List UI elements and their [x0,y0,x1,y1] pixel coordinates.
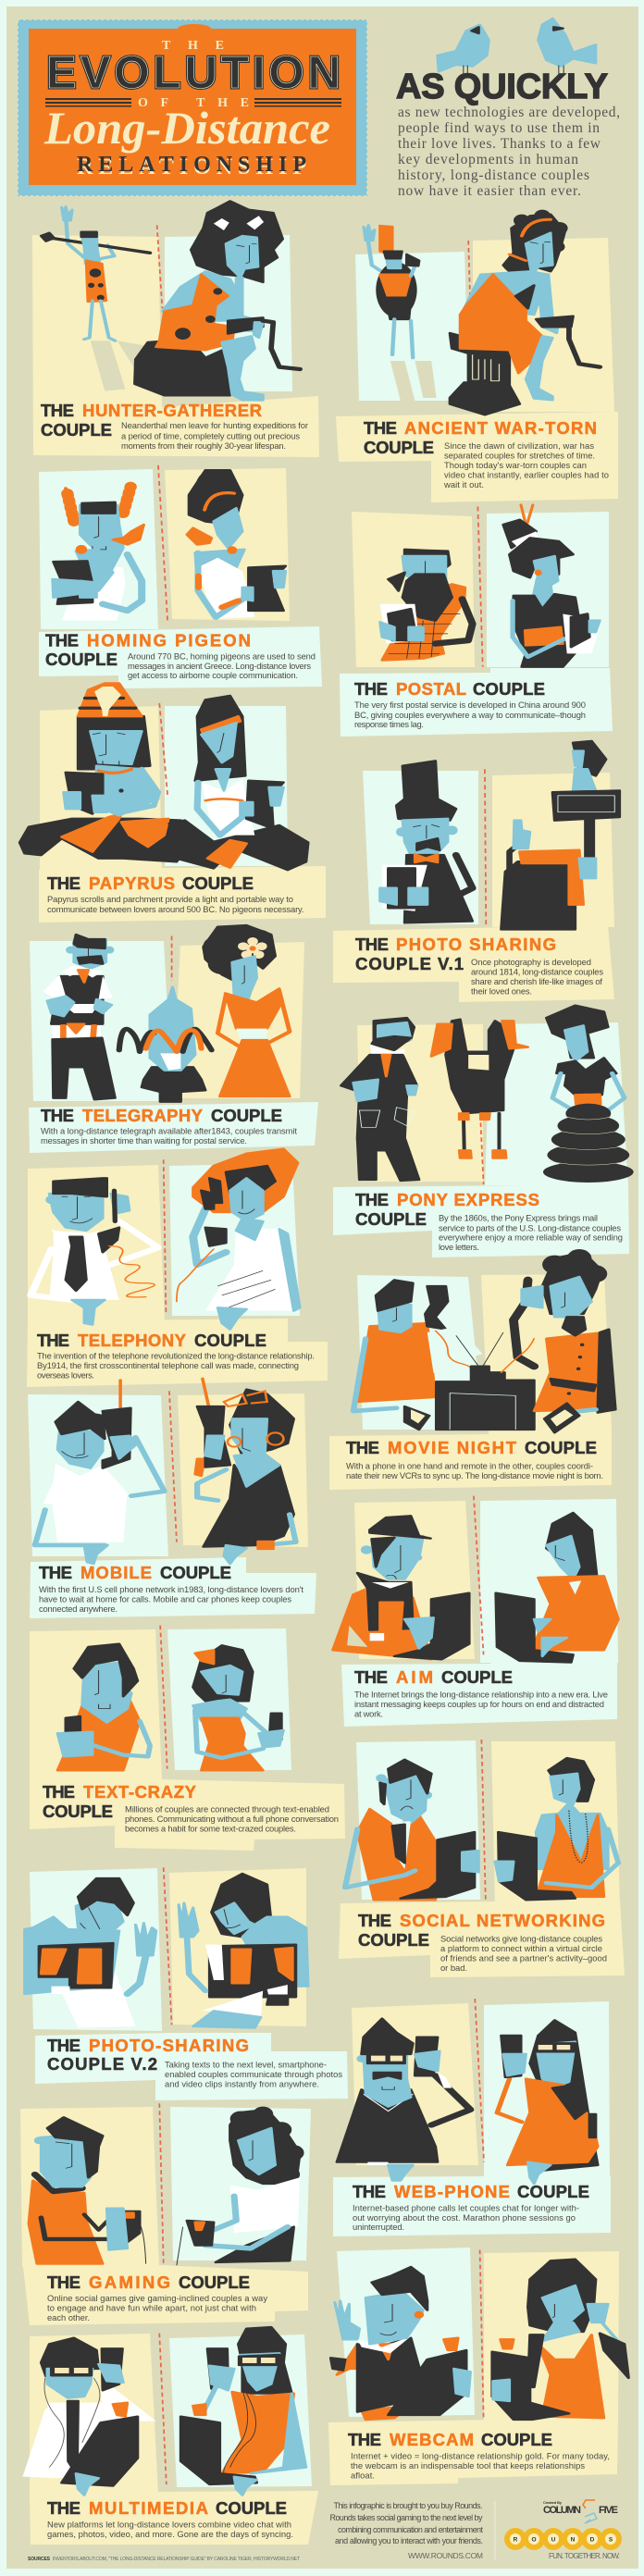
heading [348,2430,552,2449]
aim man figure [333,1516,469,1659]
photo woman figure [179,1874,308,2028]
description: becomes a habit for some text-crazed couples. [125,1823,296,1834]
description [47,894,303,914]
panel: multimedia couple [22,2327,318,2545]
heading [41,1106,282,1125]
top hat man figure [380,761,473,923]
heading [354,679,545,699]
heading [45,631,251,669]
description: afloat. [351,2471,375,2480]
description [39,1584,303,1614]
panel: homing pigeon couple [39,465,322,688]
panel: postal couple [340,505,613,737]
heading [346,1438,597,1457]
description: video chat instantly, earlier couples had to [444,470,609,479]
logo: column five: FIVE [599,2505,618,2516]
hunter woman figure [135,201,300,401]
heading: COUPLE [358,1930,429,1950]
gaming man figure [29,2117,146,2264]
heading: TELEGRAPHY [82,1106,204,1125]
backdrop and caption box [30,2334,318,2545]
heading: THE [364,418,397,438]
heading [47,873,254,893]
title plate: RELATIONSHIP [77,155,306,180]
heading: THE [354,679,388,699]
description: the webcam is an indispensable tool that keeps relationships [351,2460,585,2471]
description: games, photos, video, and more. Gone are the days of syncing. [47,2529,293,2539]
description: uninterrupted. [353,2222,404,2232]
backdrop and caption box [333,1022,629,1257]
description: Papyrus scrolls and parchment provide a light and portable way to [47,894,293,904]
geisha figure [503,505,601,667]
heading: THE [37,1331,69,1350]
social man figure [345,1760,478,1900]
title plate: OF THE [138,96,249,110]
heading: TEXT-CRAZY [83,1782,197,1802]
heading: PHOTO-SHARING [89,2036,249,2055]
description: Since the dawn of civilization, war has [444,440,594,451]
description: enabled couples communicate through photos [165,2069,342,2079]
logo: rounds: FUN. TOGETHER. NOW. [549,2552,620,2560]
mobile woman figure [195,1379,296,1564]
logo: rounds [504,2528,622,2560]
heading: COUPLE [41,420,112,440]
heading: as quickly: AS QUICKLY [396,68,608,106]
heading: THE [45,631,79,650]
heading: COUPLE V.1 [355,954,464,973]
heading: THE [41,401,74,420]
heading: THE [39,1563,72,1582]
intro paragraph: history, long-distance couples [398,167,589,183]
description: By the 1860s, the Pony Express brings mail [439,1212,598,1223]
heading: THE [47,873,80,893]
heading [355,935,556,973]
description: response times lag. [354,719,424,729]
heading: THE [358,1911,391,1930]
gaming woman figure [177,2107,304,2265]
panel: telegraphy couple [29,925,318,1153]
telegrapher man figure [43,935,115,1099]
description: moments from their roughly 30-year lifespan. [121,440,286,451]
description: a period of time, completely cutting out precious [121,431,300,440]
remote controls [404,1404,579,1432]
logo: rounds: S [609,2537,613,2543]
webcam man figure [330,2267,470,2420]
backdrop and caption box [20,2103,311,2325]
title plate: THE [162,39,224,53]
multimedia man figure [22,2338,156,2496]
panel: papyrus couple [19,683,326,923]
heading: THE [355,1190,389,1209]
social woman figure [495,1758,618,1900]
heading: HOMING PIGEON [87,631,251,650]
description: at work. [354,1708,383,1719]
intro paragraph: their love lives. Thanks to a few [398,136,601,152]
backdrop and caption box [333,769,614,1002]
description: Once photography is developed [471,957,591,967]
description: a platform to connect within a virtual circle [440,1943,602,1953]
heading: COUPLE [481,2430,552,2449]
panel: ancient war-torn couple [336,210,618,502]
description: BC, giving couples everywhere a way to communicate–though [354,710,586,720]
description: Though today's war-torn couples can [444,460,587,470]
description: overseas lovers. [37,1369,94,1381]
heading: THE [43,1782,75,1802]
heading: PAPYRUS [89,873,175,893]
heading: MOVIE NIGHT [388,1438,517,1457]
intro paragraph: as new technologies are developed, [398,105,620,120]
description: out worrying about the cost. Marathon phone sessions go [353,2212,576,2223]
photo man figure [25,1878,156,2028]
backdrop and caption box [333,1999,611,2236]
heading: THE [346,1438,379,1457]
heading: PONY EXPRESS [397,1190,539,1209]
logo: column five: Created By [543,2500,563,2505]
panel: webcam couple [328,2248,628,2485]
heading [364,418,597,457]
heading: COUPLE [355,1209,427,1229]
panel: telephony couple [27,1149,328,1387]
intro paragraph: now have it easier than ever. [398,183,581,199]
title plate: EVOLUTION [46,48,341,98]
description: Taking texts to the next level, smartphone- [165,2060,327,2069]
heading: COUPLE [211,1106,282,1125]
description: instant messaging keeps couples up for hours on end and distracted [354,1699,604,1709]
description: Social networks give long-distance couples [440,1934,602,1943]
movie man figure [353,1280,483,1411]
sponsor note: combining communication and entertainment [338,2525,483,2534]
heading: THE [348,2430,381,2449]
heading: COUPLE V.2 [47,2054,157,2074]
description: Around 770 BC, homing pigeons are used to send [128,651,316,661]
description: connected anywhere. [39,1604,118,1614]
backdrop and caption box [39,465,322,688]
mobile man figure [35,1381,165,1564]
backdrop and caption box [329,1274,612,1490]
description: and video clips instantly from anywhere. [165,2078,319,2089]
sponsor note: Rounds takes social gaming to the next level by [329,2513,483,2522]
heading [358,1911,605,1950]
description [354,700,586,729]
crinoline woman figure [543,1006,634,1183]
backdrop and caption box [340,506,613,737]
description: share and cherish life-like images of [471,976,602,986]
heading [47,2273,250,2292]
webcam woman figure [492,2260,628,2420]
description: Internet-based phone calls let couples chat for longer with- [353,2202,579,2213]
intro paragraph: key developments in human [398,152,578,167]
backdrop and caption box [336,238,618,502]
telephone woman figure [177,1149,300,1330]
description [353,2202,579,2232]
panel: social networking couple [339,1740,625,1977]
description [346,1460,603,1480]
description: New platforms let long-distance lovers combine video chat with [47,2519,291,2530]
heading: MOBILE [80,1563,152,1582]
backdrop and caption box [27,1159,328,1387]
aim woman figure [496,1513,618,1663]
heading: COUPLE [43,1802,113,1821]
description: Neanderthal men leave for hunting expeditions for [121,420,308,430]
queen figure [169,696,308,870]
description [47,2519,293,2539]
description [165,2060,342,2089]
heading: COUPLE [179,2273,250,2292]
description: The very first postal service is developed in China around 900 [354,700,586,710]
description: love letters. [439,1242,479,1252]
heading: COUPLE [45,650,118,669]
backdrop and caption box [32,225,319,457]
telegraph woman figure [203,925,290,1096]
description [354,1690,608,1719]
logo: rounds: D [590,2537,595,2543]
heading: SOCIAL NETWORKING [400,1911,605,1930]
postman figure [380,550,473,660]
description: separated couples for stretches of time. [444,450,595,461]
hunter man figure [41,206,150,391]
telegraph machine [119,987,212,1102]
intro paragraph [398,105,620,199]
description: around 1814, long-distance couples [471,966,603,977]
logo: column five [543,2500,618,2523]
heading [353,2182,589,2201]
heading: THE [355,935,389,954]
pharaoh figure [19,683,193,861]
backdrop and caption box [28,1391,316,1618]
logo: rounds: R [514,2537,518,2543]
description [439,1212,623,1252]
woman holding portrait figure [502,741,620,929]
description: everywhere enjoy a more reliable way of sending [439,1232,623,1242]
backdrop and caption box [39,703,326,923]
heading: PHOTO SHARING [396,935,556,954]
panel: web-phone couple [333,1999,611,2236]
description [37,1351,315,1381]
description [471,957,603,996]
title plate: RELATIONSHIP [77,153,306,177]
description: By1914, the first crosscontinental telephone call was made, connecting [37,1360,299,1370]
description: their loved ones. [471,986,532,996]
heading [47,2036,249,2074]
description: With a long-distance telegraph available after1843, couples transmit [41,1125,297,1136]
heading: COUPLE [182,873,254,893]
greek man figure [53,485,143,621]
heading [37,1331,266,1350]
logo: rounds: O [531,2537,537,2543]
rider man figure [341,1018,419,1181]
logo: rounds: U [551,2537,556,2543]
heading: COUPLE [160,1563,231,1582]
description: get access to airborne couple communication. [128,670,298,680]
heading: THE [353,2182,386,2201]
panel: movie night couple [329,1249,615,1490]
description [47,2293,267,2322]
texting woman figure [193,1645,283,1770]
title plate: Long-Distance [43,102,330,154]
panel: aim couple [333,1496,618,1727]
heading: WEBCAM [390,2430,474,2449]
panel: photo-sharing couple v.2 [25,1867,348,2100]
heading: THE [47,2036,80,2055]
heading: COUPLE [517,2182,589,2201]
heading [39,1563,231,1582]
intro paragraph: people find ways to use them in [398,120,600,136]
backdrop and caption box [29,936,318,1153]
heading: WEB-PHONE [394,2182,510,2201]
heading [354,1667,513,1687]
greek woman figure [187,469,286,619]
heading [355,1190,539,1229]
description: have to wait at home for calls. Mobile and car phones keep couples [39,1593,291,1604]
description [121,420,308,451]
heading [41,401,262,440]
description [125,1804,339,1834]
heading: ANCIENT WAR-TORN [404,418,597,438]
logo: column five: COLUMN [543,2505,581,2516]
panel: photo sharing couple v.1 [333,741,620,1002]
backdrop and caption box [30,1867,348,2100]
title plate [18,19,367,196]
backdrop and caption box [341,1496,618,1727]
description: With the first U.S cell phone network in1983, long-distance lovers don't [39,1584,303,1594]
description: Internet + video = long-distance relationship gold. For many today, [351,2450,610,2461]
panel: mobile couple [28,1379,316,1618]
backdrop and caption box [328,2248,619,2485]
heading: THE [354,1667,388,1687]
heading: COUPLE [441,1667,513,1687]
heading: HUNTER-GATHERER [82,401,262,420]
sponsor note: WWW.ROUNDS.COM [408,2551,483,2560]
description: The invention of the telephone revolutionized the long-distance relationship. [37,1351,315,1360]
description: phones. Communicating without a full phone conversation [125,1814,339,1824]
description: service to parts of the U.S. Long-distance couples [439,1223,621,1232]
description [128,651,316,680]
heading: TELEPHONY [78,1331,187,1350]
texting man figure [57,1644,150,1770]
description [41,1125,297,1146]
telephone man figure [31,1178,158,1325]
sponsor note: This infographic is brought to you buy Rounds. [333,2501,483,2510]
movie woman figure [502,1249,615,1413]
sources line: INVENTORS.ABOUT.COM, "THE LONG-DISTANCE RELATIONSHIP GUIDE" BY CAROLINE TIGER, HISTORYWORLD.NET [53,2557,300,2562]
description: nate their new VCRs to sync up. The long-distance movie night is born. [346,1470,603,1480]
sponsor note [329,2501,496,2560]
description: to engage and have fun while apart, not just chat with [47,2302,256,2313]
heading [43,1782,197,1821]
description: Millions of couples are connected through text-enabled [125,1804,329,1814]
description: With a phone in one hand and remote in the other, couples coordi- [346,1460,593,1471]
description [443,440,609,489]
sources line: SOURCES [28,2557,51,2562]
backdrop and caption box [30,1626,345,1851]
heading: THE [41,1106,74,1125]
heading: MULTIMEDIA [89,2498,208,2518]
heading: GAMING [89,2273,170,2292]
multimedia woman figure [180,2327,306,2496]
soldier figure [364,225,437,401]
description: The Internet brings the long-distance relationship into a new era. Live [354,1690,608,1699]
heading: THE [47,2273,80,2292]
description: communicate between lovers around 500 BC. No pigeons necessary. [47,904,303,914]
description: wait it out. [443,479,484,489]
description: each other. [47,2312,90,2322]
description [351,2450,610,2480]
description: messages in shorter time than waiting for postal service. [41,1135,247,1146]
heading [47,2498,287,2518]
logo: rounds: N [571,2537,576,2543]
backdrop and caption box [339,1740,625,1977]
title plate: EVOLUTION [46,48,341,98]
panel: hunter-gatherer couple [32,201,319,457]
heading: POSTAL [396,679,466,699]
heading: AIM [396,1667,433,1687]
horse figure [431,1020,528,1158]
panel: pony express couple [333,1006,634,1257]
heading: COUPLE [216,2498,287,2518]
television [437,1332,534,1430]
heading: COUPLE [194,1331,266,1350]
heading: COUPLE [473,679,545,699]
heading: THE [47,2498,80,2518]
heading: COUPLE [525,1438,597,1457]
description: messages in ancient Greece. Long-distance lovers [128,661,311,671]
description: or bad. [440,1963,467,1973]
web-phone woman figure [497,2020,598,2184]
heading: COUPLE [364,438,434,457]
woman on pedestal figure [450,210,600,415]
web-phone man figure [337,2019,470,2181]
description [440,1934,607,1973]
description: Online social games give gaming-inclined couples a way [47,2293,267,2303]
icon: two birds [438,19,596,76]
panel: text-crazy couple [30,1626,345,1851]
panel: gaming couple [20,2103,311,2325]
sponsor note: and allowing you to interact with your friends. [335,2536,483,2545]
description: of friends and see a partner's activity–good [440,1952,607,1963]
